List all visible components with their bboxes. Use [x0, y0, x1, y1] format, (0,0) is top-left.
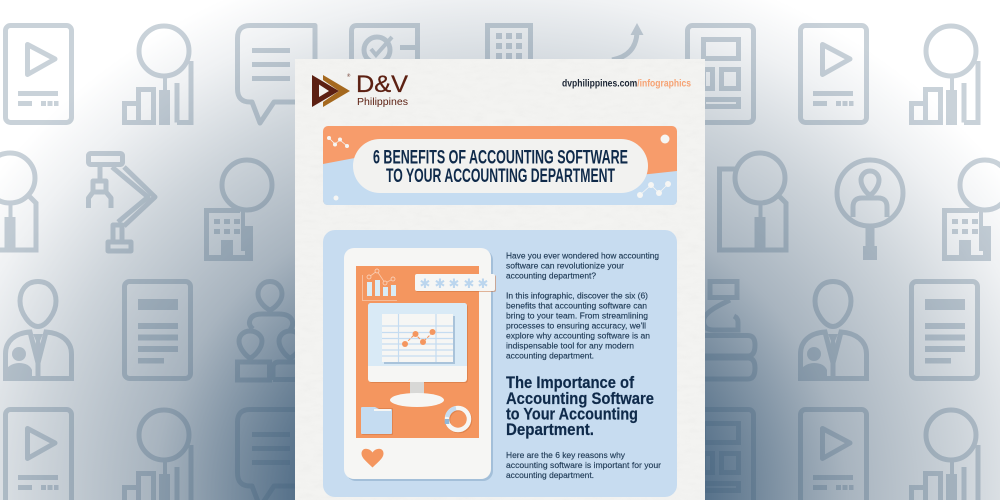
icon: magnifier document, left edge: [0, 153, 36, 252]
heading: importance: The Importance of: [506, 373, 634, 392]
spreadsheet with line chart: [382, 314, 455, 364]
text block: intro paragraph: accounting department.: [506, 350, 594, 360]
website url: dvphilippines.com/infographics: [562, 78, 691, 90]
icon: form with check: [352, 26, 418, 80]
rating box: five stars: ✱✱✱✱✱: [420, 277, 488, 292]
icon: donut chart: [447, 408, 470, 431]
text block: key reasons: [506, 450, 661, 480]
panel: paper infographic card: [295, 59, 705, 500]
panel: intro: [323, 230, 677, 497]
logo: D&V Philippines: ®: [347, 72, 351, 78]
logo: D&V Philippines: Philippines: [357, 96, 408, 108]
text block: intro paragraph: processes to ensuring accuracy, we'll: [506, 320, 646, 330]
icon: document play, top left: [6, 26, 72, 122]
icon: document play, top right: [800, 26, 866, 122]
monitor with spreadsheet: [368, 303, 468, 407]
icon: group of people: [238, 282, 305, 380]
icon: stacked hand, right: [700, 282, 755, 379]
icon: person magnifier: [837, 160, 903, 260]
icon: magnifier chart, bottom left: [124, 410, 191, 500]
text block: intro question: Have you ever wondered how accounting: [506, 250, 659, 260]
text block: key reasons: accounting department.: [506, 470, 594, 480]
icon: folder: [361, 407, 393, 435]
title text: 6 BENEFITS OF ACCOUNTING SOFTWARE: [373, 146, 628, 168]
logo: D&V Philippines: [312, 71, 408, 108]
icon: building magnifier, left: [204, 160, 272, 261]
icon: office building: [488, 26, 530, 80]
icon: heart: [362, 449, 384, 468]
icon: magnifier document, right: [720, 153, 786, 252]
text block: intro paragraph: [506, 290, 650, 360]
heading: importance: to Your Accounting: [506, 404, 638, 424]
banner decoration: dots: [327, 134, 671, 200]
logo: D&V Philippines: D&V: [356, 71, 408, 98]
title text: TO YOUR ACCOUNTING DEPARTMENT: [386, 165, 615, 187]
icon: speech bubble, bottom: [238, 410, 315, 500]
icon: magnifier chart, top left: [124, 26, 191, 125]
icon: robot arm: [88, 154, 155, 251]
icon: document play, bottom left: [6, 410, 72, 500]
icon: person with badge, left: [5, 282, 72, 381]
illustration: phone with accounting software: [344, 248, 496, 481]
phone screen: [356, 266, 479, 438]
icon: text document, left: [124, 282, 190, 378]
icon: building magnifier, right: [942, 160, 1000, 261]
icon: bar chart with trend: [362, 269, 397, 300]
text block: intro paragraph: explore why accounting software is an: [506, 330, 650, 340]
icon: person with badge, right: [800, 282, 866, 381]
text block: intro paragraph: benefits that accounting software can: [506, 300, 647, 310]
text block: intro question: [506, 250, 659, 280]
text block: key reasons: accounting software is important for your: [506, 460, 661, 470]
icon: text document, right: [912, 282, 978, 378]
text block: intro question: accounting department?: [506, 270, 596, 280]
icon: layout document, bottom right: [688, 410, 754, 500]
icon: layout document, top right: [688, 26, 754, 122]
icon: rising arrow: [612, 23, 644, 60]
icon: magnifier chart, top right: [912, 26, 978, 125]
text block: intro paragraph: indispensable tool for any modern: [506, 340, 634, 350]
text block: key reasons: Here are the 6 key reasons why: [506, 450, 626, 460]
title banner: [323, 126, 677, 205]
text block: intro paragraph: bring to your team. From streamlining: [506, 310, 648, 320]
title text: [373, 146, 628, 187]
text block: intro paragraph: In this infographic, discover the six (6): [506, 290, 648, 300]
heading: importance: Accounting Software: [506, 389, 654, 408]
heading: importance: Department.: [506, 420, 594, 439]
icon: magnifier chart, bottom right: [912, 410, 978, 500]
icon: speech bubble, top: [238, 26, 315, 123]
icon: document play, bottom right: [800, 410, 866, 500]
text block: intro question: software can revolutionize your: [506, 260, 624, 270]
heading: importance: [506, 373, 654, 439]
